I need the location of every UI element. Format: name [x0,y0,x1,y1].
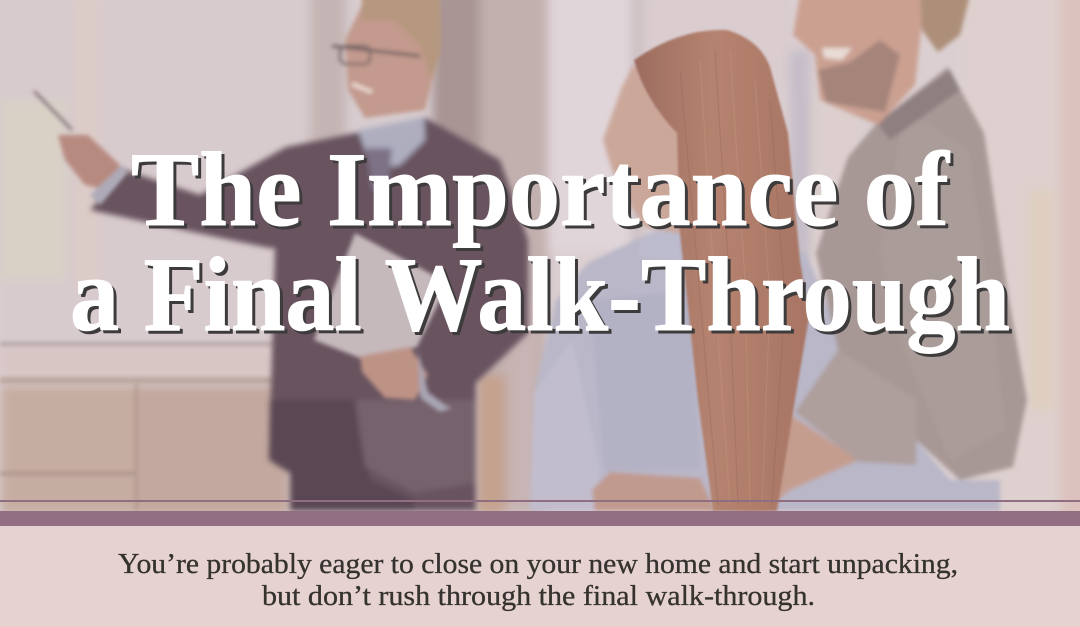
title text: The Importance of [131,131,951,248]
woman's face and neck [603,64,690,235]
title shadow: The Importance of [134,134,954,251]
woman's long hair [634,30,809,511]
sill lines [0,342,275,510]
mouth [352,84,372,92]
head [345,5,435,118]
shirt collar and tie [358,117,425,170]
agent figure [34,0,528,511]
hand pointing [58,135,120,190]
man's rolled sleeve [795,350,916,465]
woman's shirt [530,225,1000,511]
intro text: You’re probably eager to close on your new home and start unpacking, [118,549,958,580]
man's head and hair [793,0,925,125]
lower hand [360,347,428,400]
suit body [90,117,528,511]
pen [34,91,72,130]
man's forearm around woman [740,415,859,511]
clipboard [314,233,448,360]
intro text [118,549,958,612]
panel: intro background [0,526,1080,627]
title [70,131,1013,356]
couple figure [530,0,1027,511]
title shadow [73,134,1013,356]
title text [70,131,1010,353]
title text: a Final Walk-Through [70,236,1010,353]
glasses [332,46,420,56]
band: mauve stripe [0,511,1080,526]
man's shirt [816,67,1027,480]
intro text: but don’t rush through the final walk-through. [262,581,815,612]
title shadow: a Final Walk-Through [73,239,1013,356]
woman's waist hand [592,472,715,511]
thin rule over photo [0,500,1080,502]
